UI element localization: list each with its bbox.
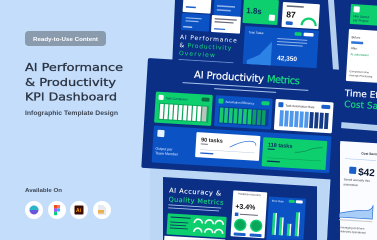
card: total tasks area chart: 42,350 (277, 55, 298, 63)
card: white before after: AI automation (350, 52, 369, 57)
slide: right time efficiency (338, 4, 377, 240)
text: description (182, 82, 308, 95)
panel: bar chart (266, 197, 306, 240)
card: total tasks area chart: Total Tasks (249, 30, 264, 35)
badge: Ready-to-Use Content (33, 37, 98, 43)
card: total tasks area chart (242, 26, 319, 72)
text block: left intro (25, 31, 123, 194)
subtitle: Infographic Template Design (25, 111, 118, 117)
panel: output per team member (152, 125, 332, 173)
panel: white accuracy stat: +3.4% (235, 203, 256, 212)
text: output label: Output per (155, 147, 173, 152)
heading: top slide title: & (179, 42, 185, 49)
heading: metrics accent: Metrics (267, 74, 300, 87)
heading: top slide title: AI Performance (180, 34, 237, 44)
slide: AI accuracy and quality metrics (163, 177, 317, 240)
card: white top left (183, 0, 212, 14)
icon: output (157, 130, 165, 137)
icon: illustrator: Ai (76, 208, 82, 214)
card: green 1.8s: 1.8s (246, 6, 263, 16)
card: 118 tasks: 118 tasks (268, 142, 292, 150)
card: white 87 gauge: 87 (286, 9, 296, 20)
panel: white accuracy stat (231, 190, 267, 238)
panel: bar chart: Error Rate (272, 199, 284, 203)
card contents: Saved annually thru (344, 177, 371, 183)
heading: top slide title (179, 34, 237, 63)
slide: AI productivity metrics (141, 58, 345, 180)
text: description (168, 204, 221, 212)
title: KPI Dashboard (25, 90, 117, 104)
panel: green gauges (167, 213, 227, 238)
panel: task completion (154, 92, 213, 126)
panel: task automation rate: Task Automation Rate (285, 103, 315, 109)
heading: accuracy: AI Accuracy & (169, 186, 221, 198)
card: white cost savings (338, 141, 377, 240)
icon: canva (25, 201, 43, 219)
card: 118 tasks (262, 137, 327, 170)
card: green time saved: per Project (353, 18, 369, 23)
card: green time saved (350, 4, 377, 26)
card contents: automation (343, 182, 359, 187)
card: white before after (346, 29, 377, 83)
card contents (338, 150, 377, 235)
panel: automation efficiency: Automation Efficiency (225, 100, 255, 106)
slide contents (164, 186, 306, 240)
icons: available platforms (25, 201, 111, 219)
heading: time efficiency (343, 89, 377, 114)
availability label: Available On (25, 188, 63, 194)
heading: quality metrics: Quality Metrics (168, 195, 224, 207)
card contents: Leveraging AI-driven (339, 225, 365, 231)
card: green time saved: Hire Saved (353, 14, 369, 19)
heading: productivity metrics: AI Productivity (194, 70, 264, 85)
card: 90 tasks (195, 132, 260, 161)
text: output label: Team Member (155, 151, 179, 157)
card: white small (211, 15, 241, 34)
card: white before after: Before (351, 35, 361, 40)
icon: figma (48, 201, 66, 219)
card contents: $42 (358, 167, 376, 179)
card: white bottom (164, 236, 225, 240)
card: blue small (181, 13, 210, 32)
heading: top slide title: Productivity (187, 42, 232, 52)
title: & Productivity (25, 76, 117, 89)
card: blue top (213, 0, 242, 17)
background: dark slide stack (150, 0, 377, 240)
panel: task completion: Task Completion (165, 96, 188, 102)
title: AI Performance (25, 61, 123, 74)
panel: white accuracy stat: Prediction Accuracy (238, 192, 262, 197)
heading: top slide title: Overview (179, 50, 215, 59)
panel: automation efficiency (214, 95, 273, 130)
icon: eps file (93, 201, 111, 219)
slide: top overview (179, 0, 320, 72)
badge (25, 31, 106, 46)
card contents: minimizes operational (338, 229, 366, 235)
card: white before after: After (351, 46, 357, 51)
card: white before after: Average Processing (349, 73, 373, 79)
panel: task automation rate (274, 99, 334, 133)
card: green 1.8s (242, 0, 279, 25)
card: white before after: Comparison time (349, 69, 370, 74)
card: 90 tasks: 90 tasks (201, 137, 223, 145)
card: white 87 gauge (281, 2, 320, 29)
